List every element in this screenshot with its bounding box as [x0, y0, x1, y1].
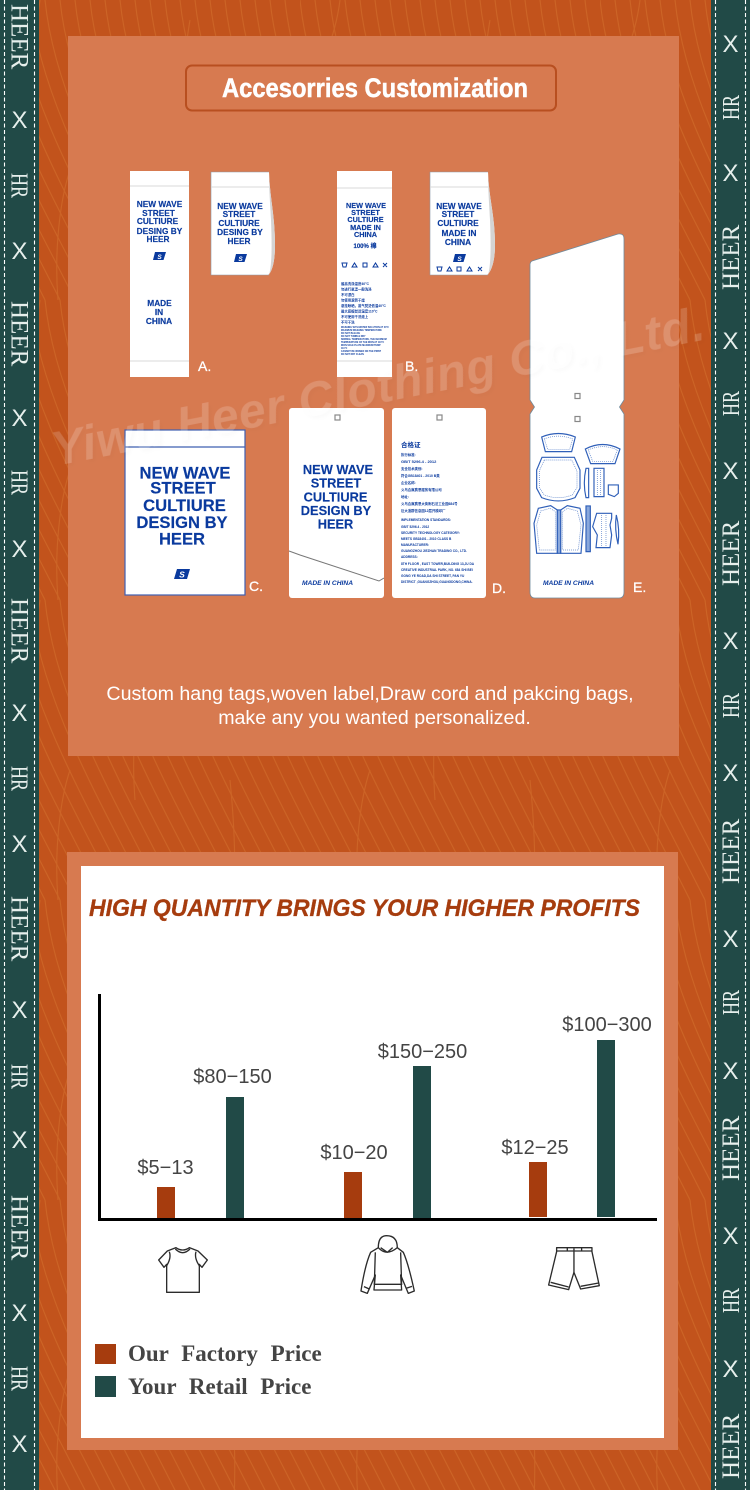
woven label A folded: DESING BY [217, 227, 263, 237]
hang tag D back: 合格证 [401, 440, 421, 449]
woven label B long: CHINA [354, 230, 378, 239]
hang tag D back: GONG YE ROAD,DA SHI STREET, PAN YU [401, 574, 465, 578]
hang tag D back: SECURITY TECHNOLOGY CATEGORY: [401, 531, 460, 535]
right stitched strip: X [722, 760, 739, 787]
right stitched strip: HEER [718, 520, 745, 586]
woven label B long [337, 171, 392, 377]
garment pattern drawing [534, 433, 620, 553]
icon: hoodie [361, 1236, 414, 1293]
left stitched strip: X [11, 1431, 28, 1458]
right stitched strip: HEER [718, 1115, 745, 1181]
left stitched strip: HEER [6, 301, 32, 367]
left stitched strip: X [11, 700, 28, 727]
left stitched strip: HR [6, 1064, 32, 1089]
watermark: Yiwu Heer Clothing Co., Ltd. [47, 298, 709, 477]
hang tag D front [289, 408, 384, 598]
heading: Accesorries Customization: Accesorries Customization [222, 73, 528, 103]
caption text [106, 683, 634, 729]
label C bag: CULTIURE [143, 496, 226, 515]
woven label A folded: CULTIURE [218, 218, 260, 228]
bar chart [100, 994, 657, 1220]
woven label A long: DESING BY [137, 226, 183, 236]
woven label B folded: CULTIURE [437, 218, 479, 228]
woven label A long: CHINA [146, 316, 172, 326]
woven label B long: IRON SOLE PLATE MAXIMUM TEMP [341, 344, 381, 347]
left stitched strip: HEER [6, 4, 32, 70]
woven label B long: 110°C [341, 348, 348, 350]
label letter B: B. [405, 358, 418, 374]
left stitched strip [0, 0, 39, 1490]
right stitched strip [711, 0, 750, 1490]
hang tag D back: GB/T 5296.4 - 2012 [401, 525, 429, 529]
woven label B long: DO NOT BLEACH [341, 332, 360, 335]
left stitched strip: HR [6, 470, 32, 495]
label C bag [125, 430, 245, 595]
hang tag E folded: MADE IN CHINA [543, 580, 594, 587]
legend: Our Factory Price [128, 1341, 322, 1366]
left stitched strip: HR [6, 766, 32, 791]
bar chart: $100−300 [562, 1014, 652, 1036]
right stitched strip: X [722, 1223, 739, 1250]
right stitched strip: HR [719, 95, 745, 120]
woven label B long: 最大底板熨烫温度110°C [341, 308, 378, 314]
icon: shorts [549, 1248, 599, 1290]
woven label A long: IN [155, 307, 163, 317]
woven label B folded: MADE IN [441, 228, 477, 238]
hang tag D back: DISTRICT ,GUANGZHOU,GUANGDONG,CHINA. [401, 580, 473, 584]
label C bag: DESIGN BY [136, 513, 228, 532]
woven label B folded: S [457, 256, 462, 263]
hang tag D front: STREET [311, 476, 361, 490]
hang tag D back: 安全技术类别: [401, 466, 422, 471]
left stitched strip: HEER [6, 1195, 32, 1261]
woven label A folded: NEW WAVE [217, 201, 263, 211]
right stitched strip: X [722, 328, 739, 355]
woven label A long [130, 171, 189, 377]
woven label B long: DO NOT TUMBLE DRY [341, 336, 366, 338]
woven label A long: CULTIURE [137, 216, 179, 226]
woven label B long: 勿进行氯漂一般洗涤 [341, 286, 372, 292]
woven label A long: STREET [142, 208, 175, 218]
woven label A long: HEER [146, 234, 170, 244]
hang tag D front: MADE IN CHINA [302, 580, 353, 587]
left stitched strip: HR [6, 1366, 32, 1391]
left stitched strip: HR [6, 173, 32, 198]
right stitched strip: X [722, 628, 739, 655]
woven label B folded: CHINA [445, 237, 471, 247]
icon: t-shirt [159, 1248, 207, 1292]
hang tag D back: 义乌合赢赛恩服务有限公司 [401, 487, 442, 492]
label C bag: NEW WAVE [140, 464, 230, 482]
woven label A folded: HEER [227, 236, 251, 246]
panel: accessories customization [47, 36, 709, 756]
woven label B long: 100% 棉 [353, 242, 377, 250]
hang tag D back: 符合GB18401 - 2010 B类 [401, 473, 440, 478]
woven label B long: 不可干洗 [341, 320, 355, 324]
label letter D: D. [492, 580, 506, 596]
woven label B long: 不可漂白 [341, 292, 355, 297]
woven label B folded: STREET [442, 209, 474, 219]
hang tag D back: IMPLEMENTATION STANDARDS: [401, 518, 451, 522]
left stitched strip: X [11, 107, 28, 134]
legend: Your Retail Price [128, 1374, 311, 1399]
right stitched strip: X [722, 926, 739, 953]
woven label B long: NEW WAVE [346, 201, 386, 210]
right stitched strip: HR [719, 1288, 745, 1313]
left stitched strip: X [11, 997, 28, 1024]
hang tag E folded [530, 234, 624, 598]
left stitched strip: X [11, 831, 28, 858]
woven label B long: STREET [351, 208, 380, 217]
right stitched strip: X [722, 1356, 739, 1383]
bar chart: $10−20 [320, 1142, 388, 1164]
bar chart: $80−150 [193, 1066, 272, 1088]
woven label B long: TEMPERATURE OF THE IRON AT 110°C [341, 341, 384, 344]
woven label B folded [430, 172, 495, 275]
hang tag D front: DESIGN BY [301, 503, 372, 518]
hang tag D back: GUANGZHOU JIEZHAN TRADING CO., LTD. [401, 549, 467, 553]
hang tag D back: MANUFACTURER: [401, 543, 429, 547]
right stitched strip: HEER [718, 1413, 745, 1479]
woven label B long: CULTIURE [347, 215, 384, 224]
woven label A long: S [157, 254, 162, 261]
hang tag D back: 企业名称: [401, 480, 416, 485]
label letter A: A. [198, 358, 211, 374]
bar chart: $5−13 [137, 1157, 194, 1179]
label letter E: E. [633, 579, 646, 595]
hang tag D back: 执行标准: [401, 452, 416, 457]
caption text: Custom hang tags,woven label,Draw cord and pakcing bags, [106, 683, 634, 705]
woven label B long: NORMAL TEMPERATURE, THE MAXIMUM [341, 338, 387, 341]
woven label B long: 悬挂晾晒，蒸气熨烫低温40°C [341, 303, 386, 308]
hang tag D back: 巨大道群信息园12层开模印厂 [401, 508, 446, 513]
woven label A long: NEW WAVE [137, 199, 183, 209]
hang tag D back: ADDRESS: [401, 555, 418, 559]
label C bag: STREET [150, 478, 216, 498]
panel: profits chart [67, 852, 678, 1450]
woven label B long: 勿使用滚筒干燥 [341, 298, 365, 302]
woven label B long: 最高洗涤温度40°C [341, 281, 369, 286]
right stitched strip: X [722, 31, 739, 58]
woven label B long: WASHING WITH WATER SOLUTION AT 40°C [341, 326, 389, 329]
left stitched strip: HEER [6, 896, 32, 962]
woven label B long: MADE IN [350, 223, 381, 232]
label C bag: S [179, 570, 185, 580]
woven label B long: MAXIMUM WASHING TEMPERATURE [341, 329, 382, 332]
heading: Accesorries Customization [186, 66, 556, 110]
hang tag D back [392, 408, 486, 598]
hang tag D back: MEETS GB18401 - 2010 CLASS B [401, 537, 452, 541]
hang tag D back: 地址: [401, 494, 409, 499]
chart heading: HIGH QUANTITY BRINGS YOUR HIGHER PROFITS [89, 895, 640, 922]
hang tag D front: NEW WAVE [303, 462, 374, 477]
left stitched strip: X [11, 405, 28, 432]
woven label B folded: NEW WAVE [436, 201, 482, 211]
hang tag D back: GB/T 5296.4 - 2012 [401, 459, 437, 464]
left stitched strip: HEER [6, 598, 32, 664]
right stitched strip: X [722, 458, 739, 485]
hang tag D back: 8TH FLOOR , EAST TOWER,BUILDING 13,JU DA [401, 562, 475, 566]
left stitched strip: X [11, 1127, 28, 1154]
legend [95, 1341, 322, 1399]
left stitched strip: X [11, 1300, 28, 1327]
left stitched strip: X [11, 536, 28, 563]
woven label A folded: STREET [223, 209, 255, 219]
bar chart: $12−25 [501, 1137, 569, 1159]
woven label A folded [211, 172, 275, 275]
right stitched strip: X [722, 1058, 739, 1085]
woven label A folded: S [238, 256, 243, 263]
right stitched strip: X [722, 160, 739, 187]
right stitched strip: HEER [718, 224, 745, 290]
left stitched strip: X [11, 238, 28, 265]
hang tag D front: HEER [318, 516, 353, 532]
woven label B long: CANNOT BE IRONED ON THE PRINT [341, 350, 382, 353]
bar chart: $150−250 [378, 1041, 467, 1063]
right stitched strip: HEER [718, 818, 745, 884]
hang tag D back: CREATIVE INDUSTRIAL PARK, NO. 684 SHI BEI [401, 568, 473, 572]
woven label B long: 不可使用干洗液上 [341, 314, 369, 319]
label C bag: HEER [159, 530, 205, 548]
right stitched strip: HR [719, 990, 745, 1015]
woven label B long: DO NOT DRY CLEAN [341, 353, 364, 356]
right stitched strip: HR [719, 693, 745, 718]
right stitched strip: HR [719, 391, 745, 416]
label letter C: C. [249, 578, 263, 594]
hang tag D front: CULTIURE [304, 490, 368, 504]
caption text: make any you wanted personalized. [218, 707, 531, 729]
woven label A long: MADE [147, 298, 172, 308]
hang tag D back: 义乌合赢赛恩大街附石法工业园684号 [401, 501, 458, 506]
